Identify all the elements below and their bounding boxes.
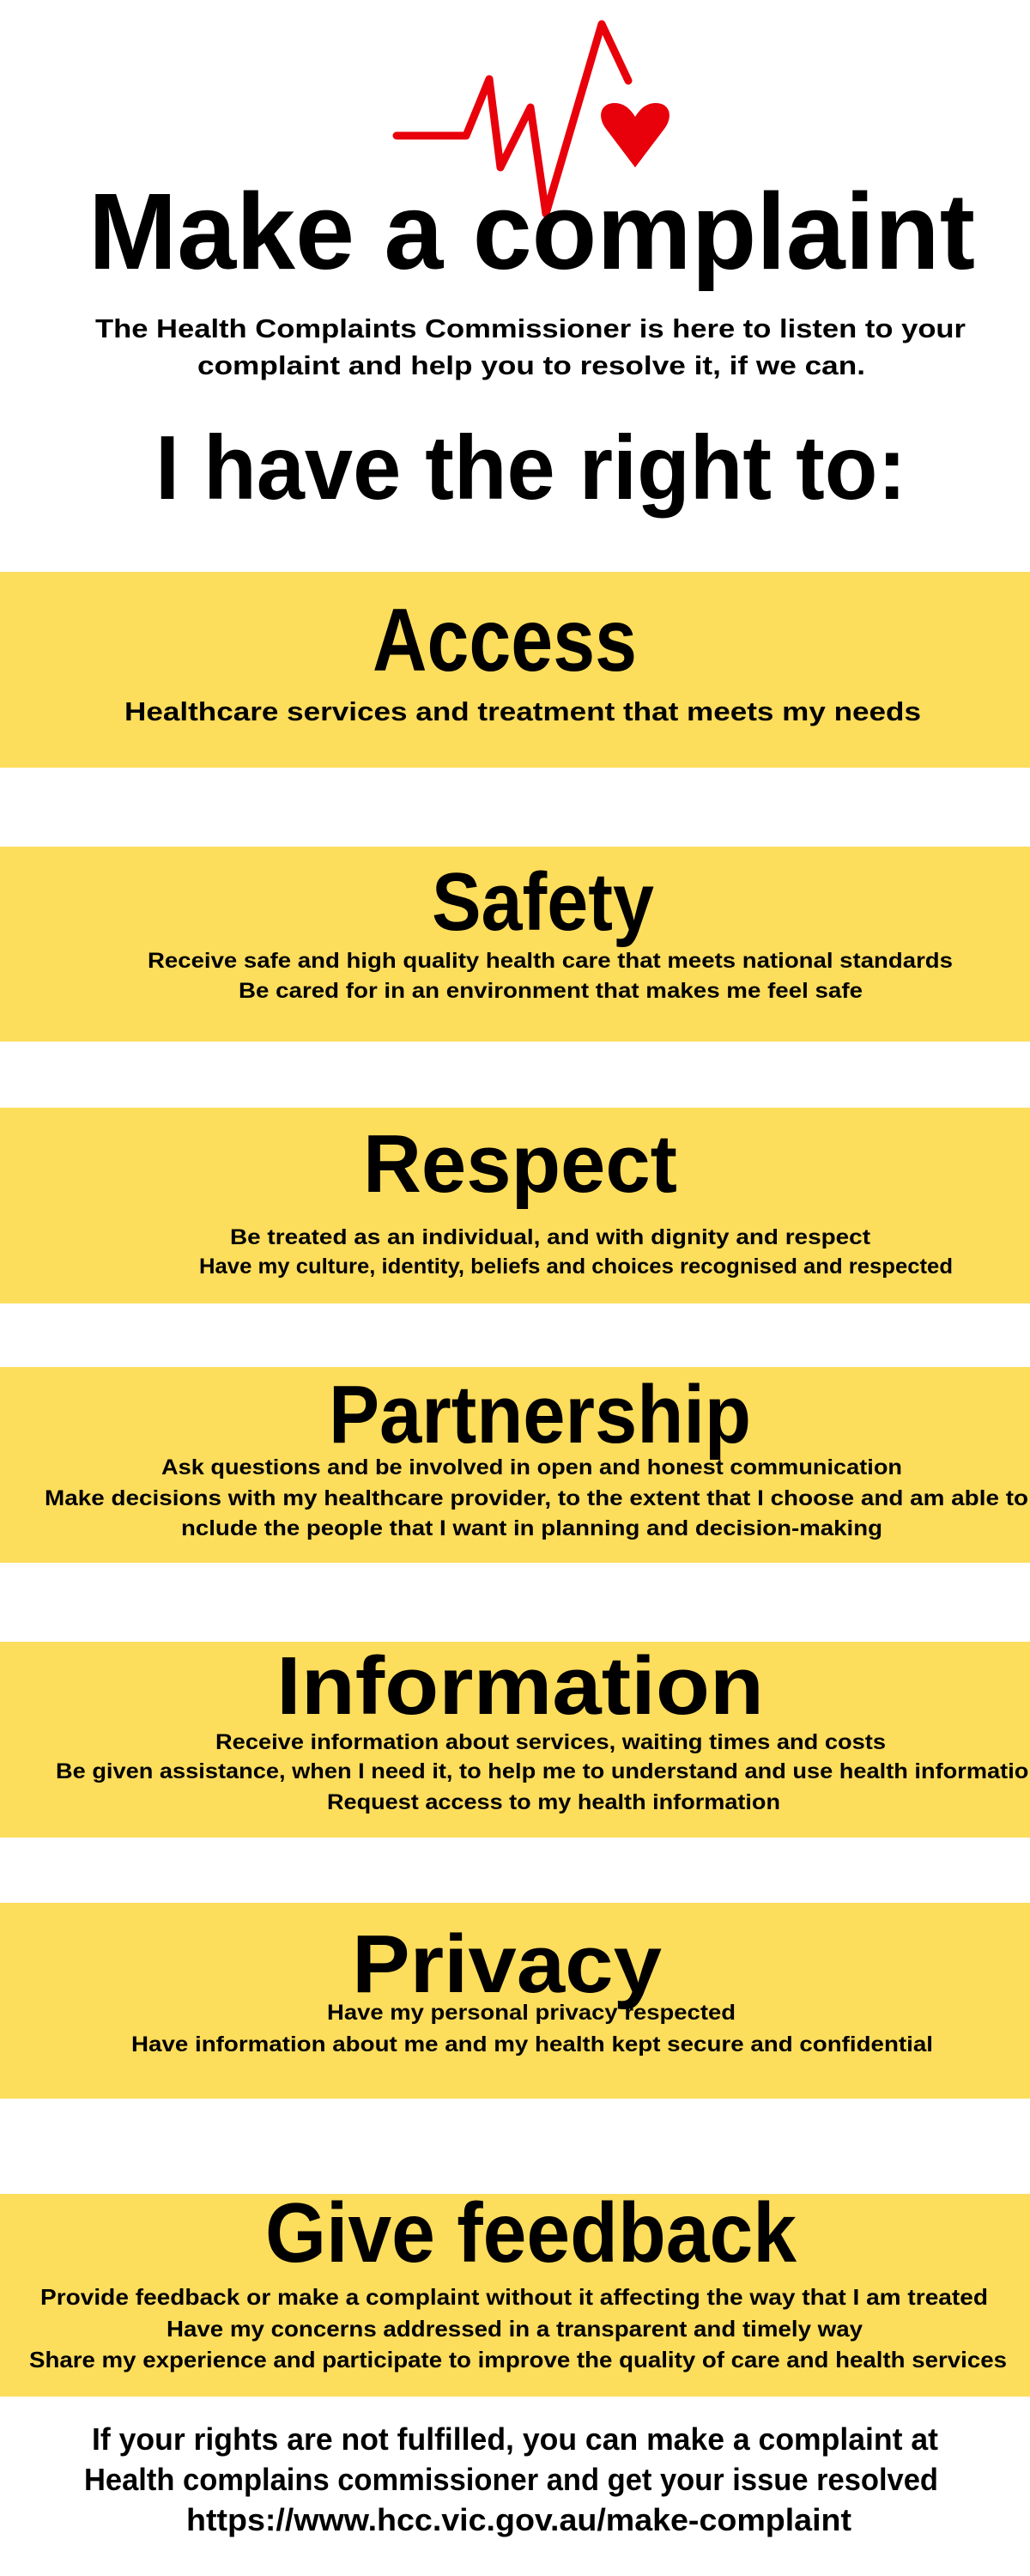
panel: Give feedback: Have my concerns addressed in a transparent and timely way (167, 2316, 863, 2342)
subtitle: complaint and help you to resolve it, if we can. (197, 350, 865, 380)
icon: heartbeat line with heart (397, 24, 670, 214)
subtitle: The Health Complaints Commissioner is here to listen to your (95, 313, 966, 343)
footer text: If your rights are not fulfilled, you can make a complaint at (92, 2421, 938, 2457)
footer text: Health complains commissioner and get your issue resolved (84, 2462, 938, 2497)
panel: Partnership: nclude the people that I want in planning and decision-making (181, 1516, 882, 1540)
heading: I have the right to: I have the right to: (155, 417, 906, 519)
panel: Partnership: Ask questions and be involved in open and honest communication (161, 1455, 902, 1479)
panel: Information: Receive information about services, waiting times and costs (215, 1730, 886, 1754)
panel: Respect: Respect (363, 1118, 677, 1210)
panel: Safety: Receive safe and high quality health care that meets national standards (148, 949, 953, 973)
panel: Partnership (0, 1367, 1030, 1563)
panel: Safety: Safety (432, 856, 654, 948)
panel: Partnership: Make decisions with my healthcare provider, to the extent that I choose and am able to (45, 1486, 1028, 1510)
footer text (84, 2421, 938, 2537)
panel: Access: Healthcare services and treatment that meets my needs (124, 696, 921, 726)
panel: Respect: Be treated as an individual, and with dignity and respect (230, 1225, 871, 1249)
panel: Access: Access (373, 591, 637, 690)
panel: Partnership: Partnership (329, 1369, 751, 1461)
panel: Privacy: Have my personal privacy respected (327, 2001, 736, 2025)
panel: Information (0, 1640, 1030, 1838)
panel: Information: Request access to my health information (327, 1790, 780, 1814)
panel: Access (0, 572, 1030, 768)
panel: Give feedback: Provide feedback or make a complaint without it affecting the way that I am treated (40, 2284, 988, 2310)
subtitle (95, 313, 966, 380)
panel: Safety (0, 847, 1030, 1042)
panel: Respect: Have my culture, identity, beliefs and choices recognised and respected (199, 1255, 953, 1279)
panel: Safety: Be cared for in an environment that makes me feel safe (239, 979, 863, 1003)
panel: Privacy (0, 1903, 1030, 2099)
panel: Privacy: Have information about me and my health kept secure and confidential (131, 2032, 933, 2057)
panel: Respect (0, 1108, 1030, 1303)
panel: Privacy: Privacy (352, 1918, 662, 2010)
panel: Give feedback: Share my experience and participate to improve the quality of care and health services (29, 2347, 1007, 2372)
panel: Information: Be given assistance, when I need it, to help me to understand and use health information (56, 1759, 1030, 1783)
panel: Information: Information (276, 1640, 764, 1732)
footer text: https://www.hcc.vic.gov.au/make-complaint (186, 2502, 851, 2537)
title: Make a complaint (88, 171, 975, 292)
panel: Give feedback (0, 2185, 1030, 2397)
panel: Give feedback: Give feedback (265, 2185, 797, 2280)
